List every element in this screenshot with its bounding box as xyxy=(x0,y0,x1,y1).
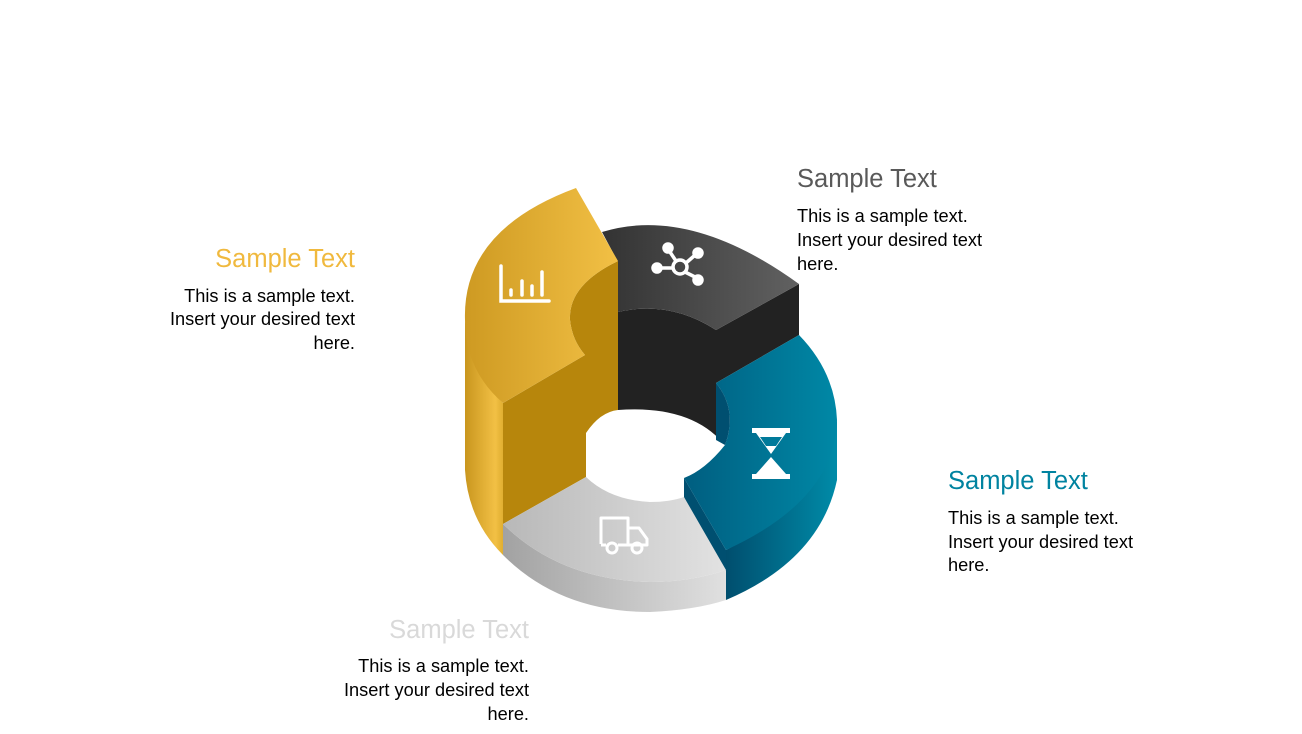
text block: light gray: This is a sample text. xyxy=(358,656,529,676)
segment: light gray xyxy=(503,477,726,612)
segment: black xyxy=(602,225,799,443)
text block: teal xyxy=(948,467,1133,575)
icon: network xyxy=(653,244,702,284)
text block: light gray: Sample Text xyxy=(389,616,529,644)
text block: light gray: here. xyxy=(488,704,529,724)
text block: yellow: here. xyxy=(314,333,355,353)
text block: yellow: Sample Text xyxy=(215,245,355,273)
segment: yellow xyxy=(465,188,618,555)
text block: dark gray: here. xyxy=(797,254,838,274)
text block: teal: This is a sample text. xyxy=(948,508,1119,528)
text block: teal: here. xyxy=(948,555,989,575)
text block: teal: Insert your desired text xyxy=(948,532,1133,552)
text block: light gray: Insert your desired text xyxy=(344,680,529,700)
text block: yellow xyxy=(170,245,355,353)
text block: yellow: Insert your desired text xyxy=(170,309,355,329)
text block: dark gray: Sample Text xyxy=(797,165,937,193)
text block: dark gray: Insert your desired text xyxy=(797,230,982,250)
text block: teal: Sample Text xyxy=(948,467,1088,495)
text block: yellow: This is a sample text. xyxy=(184,286,355,306)
icon: truck xyxy=(601,518,647,553)
text block: light gray xyxy=(344,616,529,724)
3d donut chart xyxy=(465,188,837,612)
icon: hourglass xyxy=(752,428,790,479)
text block: dark gray: This is a sample text. xyxy=(797,206,968,226)
icon: bar chart xyxy=(501,266,549,301)
text block: dark gray xyxy=(797,165,982,274)
segment: teal xyxy=(684,335,837,600)
